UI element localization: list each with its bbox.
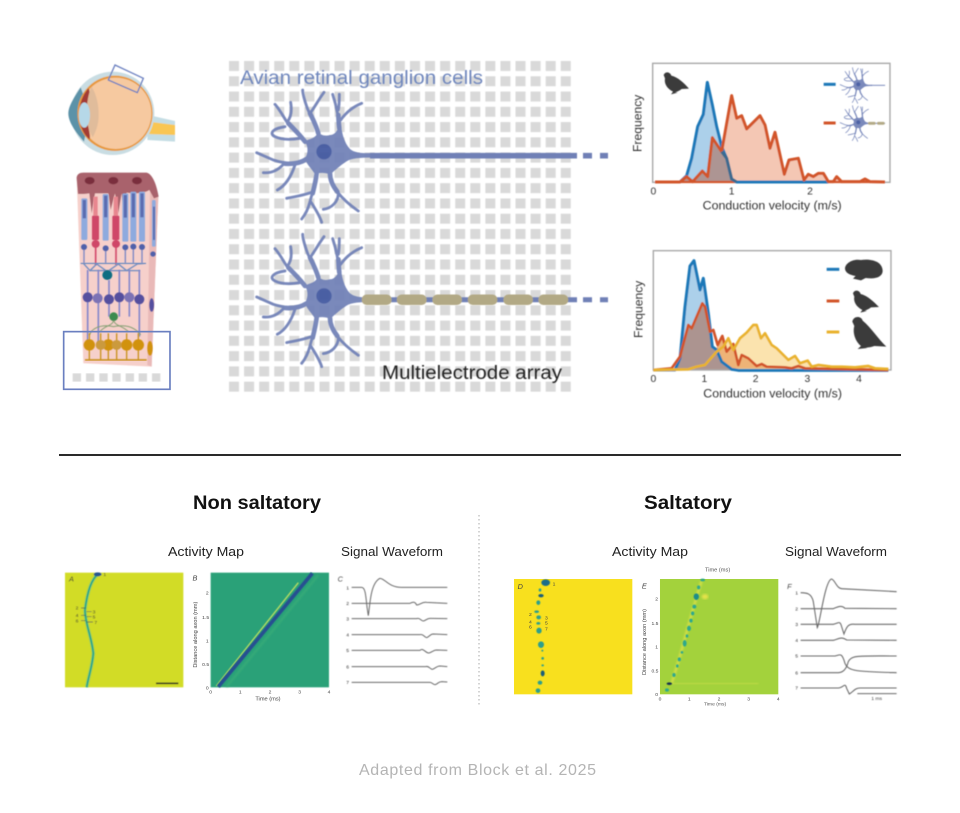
panel D: saltatory activity map <box>514 579 632 694</box>
non-saltatory neuron <box>257 90 608 222</box>
label: multielectrode array: Multielectrode array <box>382 363 563 384</box>
panel B: non saltatory space-time plot: 1 <box>206 638 209 644</box>
panel B: non saltatory space-time plot: 2 <box>269 689 272 695</box>
panel C: non saltatory signal waveforms: 4 <box>346 633 349 639</box>
panel B: non saltatory space-time plot: 3 <box>298 689 301 695</box>
panel B: non saltatory space-time plot: B <box>193 574 198 583</box>
panel E: saltatory space-time plot: 0 <box>655 692 658 698</box>
retina cross-section illustration <box>64 173 170 389</box>
panel F: saltatory signal waveforms: 5 <box>795 654 798 660</box>
chart: conduction velocity across species <box>631 251 891 400</box>
panel F: saltatory signal waveforms <box>787 579 897 702</box>
panel A: non saltatory activity map: 7 <box>94 620 97 626</box>
panel E: saltatory space-time plot: 0.5 <box>652 668 659 674</box>
panel D: saltatory activity map: 7 <box>545 627 548 633</box>
panel E: saltatory space-time plot: 3 <box>747 697 750 703</box>
axis title: conduction velocity: Conduction velocity (m/s) <box>703 198 842 212</box>
retina tissue column <box>77 173 159 367</box>
chart: conduction velocity in quail cells <box>631 63 890 212</box>
panel B: non saltatory space-time plot: 0 <box>206 686 209 692</box>
panel B: non saltatory space-time plot: Distance along axon (mm) <box>193 602 199 668</box>
panel D: saltatory activity map: 5 <box>545 621 548 627</box>
panel F: saltatory signal waveforms: 7 <box>795 686 798 692</box>
panel E: saltatory space-time plot: Distance along axon (mm) <box>642 609 648 675</box>
saltatory myelinated neuron <box>257 234 608 367</box>
panel C: non saltatory signal waveforms: 1 <box>346 585 349 591</box>
panel C: non saltatory signal waveforms: 3 <box>346 616 349 622</box>
label: signal waveform right: Signal Waveform <box>785 544 887 559</box>
multielectrode array grid <box>229 61 572 392</box>
axis tick labels: 0 <box>650 186 656 197</box>
rod and cone photoreceptors <box>81 192 156 265</box>
horizontal and amacrine cells <box>81 263 146 280</box>
panel E: saltatory space-time plot: E <box>642 581 647 590</box>
legend: myelinated neuron <box>824 106 885 141</box>
panel B: non saltatory space-time plot: 2 <box>206 591 209 597</box>
axis title: conduction velocity: Conduction velocity (m/s) <box>703 386 842 400</box>
panel E: saltatory space-time plot: 2 <box>655 597 658 603</box>
panel D: saltatory activity map: 2 <box>529 612 532 618</box>
axis tick labels <box>650 374 862 385</box>
panel B: non saltatory space-time plot: 0.5 <box>202 662 209 668</box>
legend: pigeon <box>827 317 886 349</box>
panel F: saltatory signal waveforms: 1 ms <box>871 696 883 702</box>
legend: quail <box>827 291 879 313</box>
axis tick labels: 1 <box>701 374 707 385</box>
bipolar cells <box>83 270 154 343</box>
panel C: non saltatory signal waveforms: 5 <box>346 648 349 654</box>
panel A: non saltatory activity map: 5 <box>93 615 96 621</box>
panel B: non saltatory space-time plot: Time (ms) <box>255 697 281 703</box>
panel E: saltatory space-time plot: 2 <box>718 697 721 703</box>
axis tick labels: 1 <box>729 186 735 197</box>
panel C: non saltatory signal waveforms <box>338 575 447 686</box>
divider <box>59 454 901 456</box>
electrode squares and selection box <box>64 332 170 389</box>
eye illustration <box>68 65 175 155</box>
panel B: non saltatory space-time plot <box>193 573 331 703</box>
panel D: saltatory activity map: 1 <box>553 581 556 587</box>
icon: quail silhouette <box>664 72 689 94</box>
label: signal waveform left: Signal Waveform <box>341 544 443 559</box>
panel D: saltatory activity map: D <box>518 582 524 591</box>
panel A: non saltatory activity map: A <box>68 574 74 583</box>
panel A: non saltatory activity map: 4 <box>76 613 79 619</box>
panel A: non saltatory activity map: 2 <box>76 606 79 612</box>
panel B: non saltatory space-time plot: 1 <box>239 689 242 695</box>
panel A: non saltatory activity map: 6 <box>76 618 79 624</box>
panel E: saltatory space-time plot: 4 <box>777 697 780 703</box>
axis tick labels <box>650 186 813 197</box>
panel E: saltatory space-time plot: 1 <box>688 697 691 703</box>
source credit: Adapted from Block et al. 2025 <box>359 762 596 779</box>
panel E: saltatory space-time plot <box>642 567 780 708</box>
label: activity map left: Activity Map <box>168 544 244 559</box>
panel D: saltatory activity map: 6 <box>529 625 532 631</box>
panel C: non saltatory signal waveforms: 2 <box>346 601 349 607</box>
panel F: saltatory signal waveforms: 6 <box>795 670 798 676</box>
panel C: non saltatory signal waveforms: C <box>338 575 344 584</box>
panel F: saltatory signal waveforms: 4 <box>795 638 798 644</box>
panel D: saltatory activity map: 4 <box>529 619 532 625</box>
panel C: non saltatory signal waveforms: 6 <box>346 664 349 670</box>
panel E: saltatory space-time plot: Time (ms) <box>704 702 727 708</box>
panel C: non saltatory signal waveforms: 7 <box>346 680 349 686</box>
panel E: saltatory space-time plot: 1 <box>655 645 658 651</box>
panel A: non saltatory activity map: 3 <box>93 609 96 615</box>
legend: guinea pig <box>827 260 883 280</box>
ganglion cells <box>84 333 153 360</box>
heading: saltatory: Saltatory <box>644 493 732 514</box>
panel A: non saltatory activity map: 1 <box>103 572 106 578</box>
panel F: saltatory signal waveforms: 3 <box>795 622 798 628</box>
axis tick labels: 3 <box>804 374 810 385</box>
amacrine green cell and arbors <box>89 312 141 335</box>
panel A: non saltatory activity map <box>65 572 183 687</box>
panel D: saltatory activity map: 3 <box>545 615 548 621</box>
axis tick labels: 2 <box>753 374 759 385</box>
axis title: frequency: Frequency <box>631 280 645 338</box>
panel F: saltatory signal waveforms: 1 <box>795 591 798 597</box>
legend: non-myelinated neuron <box>824 68 885 103</box>
panel B: non saltatory space-time plot: 4 <box>328 689 331 695</box>
panel B: non saltatory space-time plot: 0 <box>209 689 212 695</box>
axis tick labels: 0 <box>650 374 656 385</box>
panel E: saltatory space-time plot: 1.5 <box>652 621 659 627</box>
panel B: non saltatory space-time plot: 1.5 <box>202 615 209 621</box>
panel F: saltatory signal waveforms: 2 <box>795 606 798 612</box>
label: activity map right: Activity Map <box>612 544 688 559</box>
panel E: saltatory space-time plot: Time (ms) <box>705 567 730 573</box>
panel E: saltatory space-time plot: 0 <box>659 697 662 703</box>
label: avian retinal ganglion cells: Avian retinal ganglion cells <box>240 68 483 89</box>
axis tick labels: 4 <box>856 374 862 385</box>
axis tick labels: 2 <box>807 186 813 197</box>
axis title: frequency: Frequency <box>631 94 645 152</box>
heading: non saltatory: Non saltatory <box>193 493 321 514</box>
panel F: saltatory signal waveforms: F <box>787 582 792 591</box>
